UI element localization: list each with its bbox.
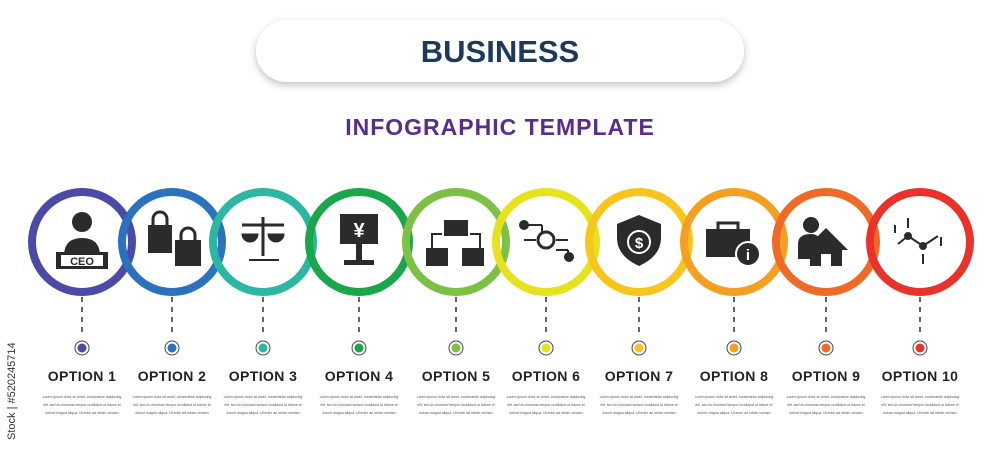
description texts: dolore magna aliqua. Ut enim ad minim veniam	[509, 411, 583, 415]
icon: shield dollar: $	[635, 235, 644, 252]
icon: timeline	[520, 221, 573, 261]
icon: briefcase info: i	[746, 247, 750, 264]
connectors: dashed lines	[82, 297, 920, 337]
description texts: Lorem ipsum dolor sit amet, consectetur adipiscing	[133, 395, 211, 399]
icon: agent house	[798, 217, 848, 266]
description texts: elit, sed do eiusmod tempor incididunt ut labore et	[224, 403, 302, 407]
description texts: dolore magna aliqua. Ut enim ad minim veniam	[883, 411, 957, 415]
icon: CEO	[56, 212, 108, 269]
description texts: dolore magna aliqua. Ut enim ad minim veniam	[226, 411, 300, 415]
markers	[75, 341, 927, 355]
icon: molecule	[895, 218, 941, 264]
description texts: Lorem ipsum dolor sit amet, consectetur adipiscing	[43, 395, 121, 399]
subtitle: INFOGRAPHIC TEMPLATE	[345, 114, 655, 140]
icon: hierarchy	[426, 220, 484, 266]
watermark id: Stock | #520245714	[6, 342, 18, 440]
option labels: OPTION 1	[48, 368, 116, 384]
description texts: dolore magna aliqua. Ut enim ad minim veniam	[135, 411, 209, 415]
description texts: Lorem ipsum dolor sit amet, consectetur adipiscing	[507, 395, 585, 399]
icon: scales	[242, 217, 284, 260]
circles	[32, 192, 970, 292]
description texts: Lorem ipsum dolor sit amet, consectetur adipiscing	[320, 395, 398, 399]
option labels: OPTION 8	[700, 368, 768, 384]
description texts: Lorem ipsum dolor sit amet, consectetur adipiscing	[224, 395, 302, 399]
description texts: Lorem ipsum dolor sit amet, consectetur adipiscing	[787, 395, 865, 399]
icon: yen sign: ¥	[353, 220, 365, 242]
description texts: elit, sed do eiusmod tempor incididunt ut labore et	[43, 403, 121, 407]
description texts: dolore magna aliqua. Ut enim ad minim veniam	[322, 411, 396, 415]
description texts: dolore magna aliqua. Ut enim ad minim veniam	[789, 411, 863, 415]
option labels: OPTION 9	[792, 368, 860, 384]
option labels: OPTION 10	[882, 368, 958, 384]
description texts: Lorem ipsum dolor sit amet, consectetur adipiscing	[417, 395, 495, 399]
description texts: elit, sed do eiusmod tempor incididunt ut labore et	[600, 403, 678, 407]
description texts: elit, sed do eiusmod tempor incididunt ut labore et	[320, 403, 398, 407]
description texts	[43, 395, 959, 415]
icon: shield dollar	[617, 215, 661, 266]
description texts: elit, sed do eiusmod tempor incididunt ut labore et	[695, 403, 773, 407]
icon: yen sign	[340, 214, 378, 265]
icon: CEO: CEO	[70, 256, 94, 268]
option labels: OPTION 2	[138, 368, 206, 384]
description texts: dolore magna aliqua. Ut enim ad minim veniam	[602, 411, 676, 415]
description texts: elit, sed do eiusmod tempor incididunt ut labore et	[881, 403, 959, 407]
option labels: OPTION 4	[325, 368, 393, 384]
description texts: dolore magna aliqua. Ut enim ad minim veniam	[45, 411, 119, 415]
option labels: OPTION 3	[229, 368, 297, 384]
icon: briefcase info	[706, 223, 760, 266]
description texts: dolore magna aliqua. Ut enim ad minim veniam	[697, 411, 771, 415]
description texts: elit, sed do eiusmod tempor incididunt ut labore et	[507, 403, 585, 407]
title pill: BUSINESS	[421, 34, 579, 69]
description texts: dolore magna aliqua. Ut enim ad minim veniam	[419, 411, 493, 415]
description texts: elit, sed do eiusmod tempor incididunt ut labore et	[787, 403, 865, 407]
description texts: elit, sed do eiusmod tempor incididunt ut labore et	[133, 403, 211, 407]
title pill	[256, 20, 744, 82]
icon: shopping bags	[148, 212, 201, 266]
description texts: elit, sed do eiusmod tempor incididunt ut labore et	[417, 403, 495, 407]
description texts: Lorem ipsum dolor sit amet, consectetur adipiscing	[695, 395, 773, 399]
option labels: OPTION 5	[422, 368, 490, 384]
option labels: OPTION 7	[605, 368, 673, 384]
option labels	[48, 368, 958, 384]
description texts: Lorem ipsum dolor sit amet, consectetur adipiscing	[600, 395, 678, 399]
description texts: Lorem ipsum dolor sit amet, consectetur adipiscing	[881, 395, 959, 399]
option labels: OPTION 6	[512, 368, 580, 384]
